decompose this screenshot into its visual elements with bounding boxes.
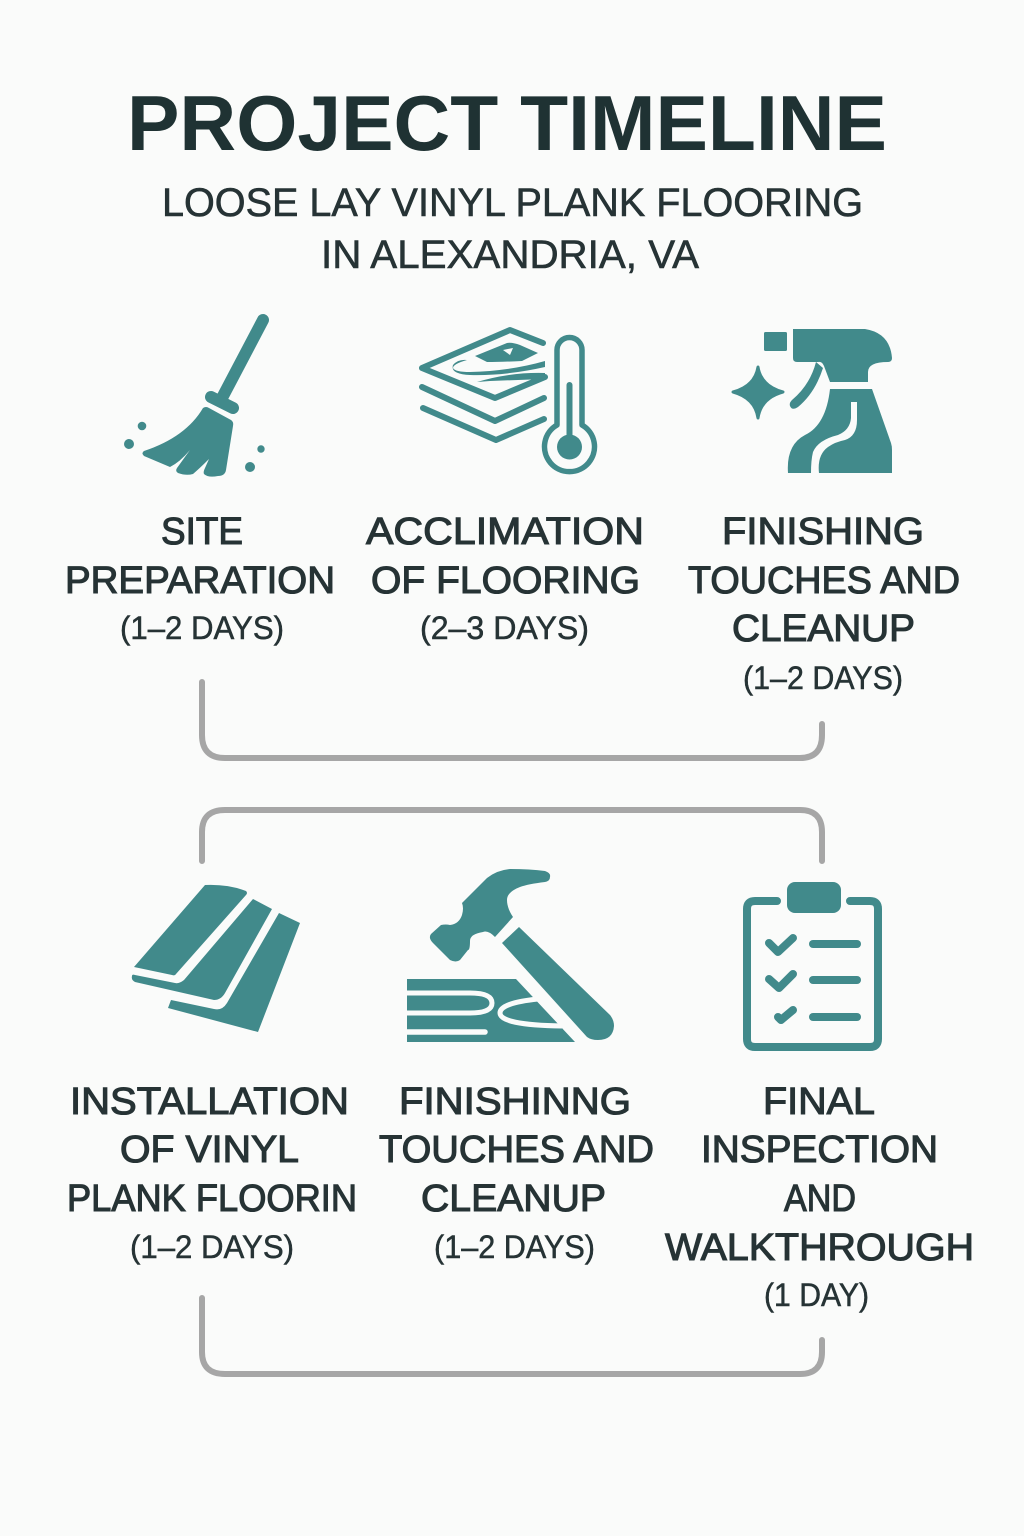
label: installation of vinyl plank floorin: INSTALLATION (70, 1081, 349, 1123)
step: final inspection and walkthrough (665, 882, 974, 1313)
label: final inspection and walkthrough: (1 DAY) (764, 1277, 869, 1313)
icon: checklist clipboard (747, 882, 878, 1047)
label: installation of vinyl plank floorin: PLANK FLOORIN (67, 1178, 357, 1220)
subtitle: IN ALEXANDRIA, VA (321, 233, 699, 277)
label: finishinng touches and cleanup: TOUCHES AND (379, 1129, 654, 1171)
label: finishing touches and cleanup: FINISHING (722, 511, 924, 553)
icon: hammer on flooring (407, 869, 614, 1042)
icon: broom (124, 320, 265, 477)
icon: spray bottle (733, 329, 892, 473)
label: acclimation of flooring: (2–3 DAYS) (420, 610, 589, 646)
subtitle (162, 181, 863, 277)
icon: plank stack and thermometer (422, 330, 594, 472)
label: installation of vinyl plank floorin (67, 1081, 357, 1265)
icon: vinyl planks (132, 885, 300, 1032)
label: final inspection and walkthrough: FINAL (763, 1081, 875, 1123)
label: site preparation (65, 511, 335, 646)
step: acclimation of flooring (366, 330, 644, 646)
connector: second row bottom bracket (202, 1298, 822, 1374)
step: finishing touches and cleanup (688, 329, 960, 696)
label: finishing touches and cleanup: (1–2 DAYS) (743, 660, 903, 696)
label: final inspection and walkthrough: INSPECTION (701, 1129, 938, 1171)
label: finishinng touches and cleanup: FINISHINNG (399, 1081, 631, 1123)
label: site preparation: (1–2 DAYS) (120, 610, 284, 646)
connector: second row top bracket (202, 810, 822, 861)
label: acclimation of flooring (366, 511, 644, 646)
step: installation of vinyl plank flooring (67, 885, 357, 1265)
label: finishinng touches and cleanup: CLEANUP (421, 1178, 606, 1220)
step: finishinng touches and cleanup (379, 869, 654, 1265)
label: installation of vinyl plank floorin: (1–2 DAYS) (130, 1229, 294, 1265)
label: finishing touches and cleanup: CLEANUP (732, 608, 915, 650)
label: final inspection and walkthrough: WALKTHROUGH (665, 1227, 974, 1269)
label: acclimation of flooring: OF FLOORING (371, 560, 640, 602)
title: PROJECT TIMELINE (127, 79, 887, 167)
subtitle: LOOSE LAY VINYL PLANK FLOORING (162, 181, 863, 225)
label: site preparation: SITE (161, 511, 243, 553)
label: finishing touches and cleanup: TOUCHES AND (688, 560, 960, 602)
label: finishing touches and cleanup (688, 511, 960, 696)
connector: first row bracket (202, 682, 822, 758)
step: site preparation (65, 320, 335, 646)
label: acclimation of flooring: ACCLIMATION (366, 511, 644, 553)
label: finishinng touches and cleanup (379, 1081, 654, 1265)
label: final inspection and walkthrough (665, 1081, 974, 1313)
label: site preparation: PREPARATION (65, 560, 335, 602)
label: final inspection and walkthrough: AND (784, 1178, 856, 1220)
label: finishinng touches and cleanup: (1–2 DAYS) (434, 1229, 595, 1265)
label: installation of vinyl plank floorin: OF VINYL (120, 1129, 299, 1171)
